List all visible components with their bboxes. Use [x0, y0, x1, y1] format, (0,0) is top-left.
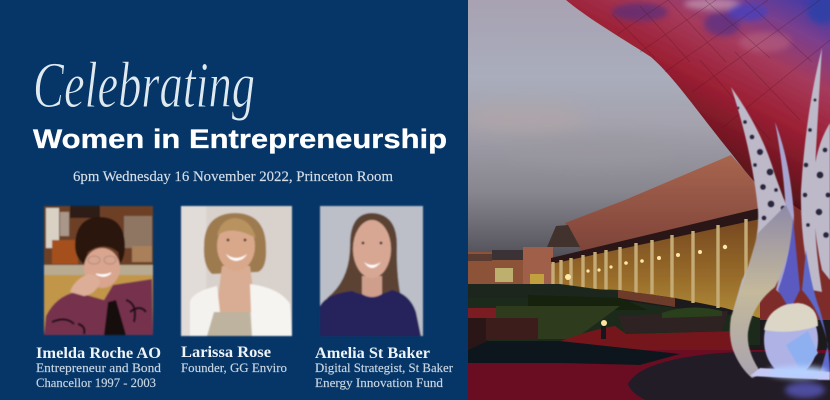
event date and location: 6pm Wednesday 16 November 2022, Princeton Room [73, 169, 394, 185]
round dark plinth [628, 352, 830, 400]
small roof turret [547, 225, 580, 247]
left navy panel [0, 0, 468, 400]
left building [468, 247, 553, 286]
speaker: Imelda Roche AO [36, 345, 162, 390]
title: Women in Entrepreneurship: Women in Entrepreneurship [33, 124, 447, 154]
lawn and hedges [468, 284, 760, 352]
upper brick wall [565, 155, 760, 256]
speaker: Amelia St Baker: Digital Strategist, St Baker [315, 361, 454, 375]
speaker: Amelia St Baker [315, 345, 454, 390]
script heading: Celebrating: Celebrating [33, 49, 255, 122]
clouds [502, 115, 549, 122]
colonnade [551, 208, 760, 318]
speaker: Larissa Rose: Founder, GG Enviro [181, 361, 287, 375]
speaker: Larissa Rose: Larissa Rose [181, 344, 271, 361]
curved roof [566, 0, 830, 320]
red paved ground [468, 326, 830, 400]
bollard light [601, 320, 607, 339]
speaker: Larissa Rose [181, 344, 287, 375]
sculpture [730, 48, 830, 380]
speaker: Amelia St Baker: Energy Innovation Fund [315, 376, 444, 390]
sculpture blue glow [768, 366, 828, 398]
sky [468, 0, 748, 258]
portrait: Imelda Roche [44, 206, 153, 335]
dark ground base [608, 290, 830, 350]
campus photo [465, 0, 830, 400]
portrait: Amelia St Baker [320, 206, 423, 336]
speaker: Imelda Roche AO: Chancellor 1997 - 2003 [36, 376, 156, 390]
portrait: Larissa Rose [181, 206, 292, 336]
speaker: Imelda Roche AO: Entrepreneur and Bond [36, 361, 162, 375]
speaker: Imelda Roche AO: Imelda Roche AO [36, 345, 161, 362]
speaker: Amelia St Baker: Amelia St Baker [315, 345, 430, 362]
